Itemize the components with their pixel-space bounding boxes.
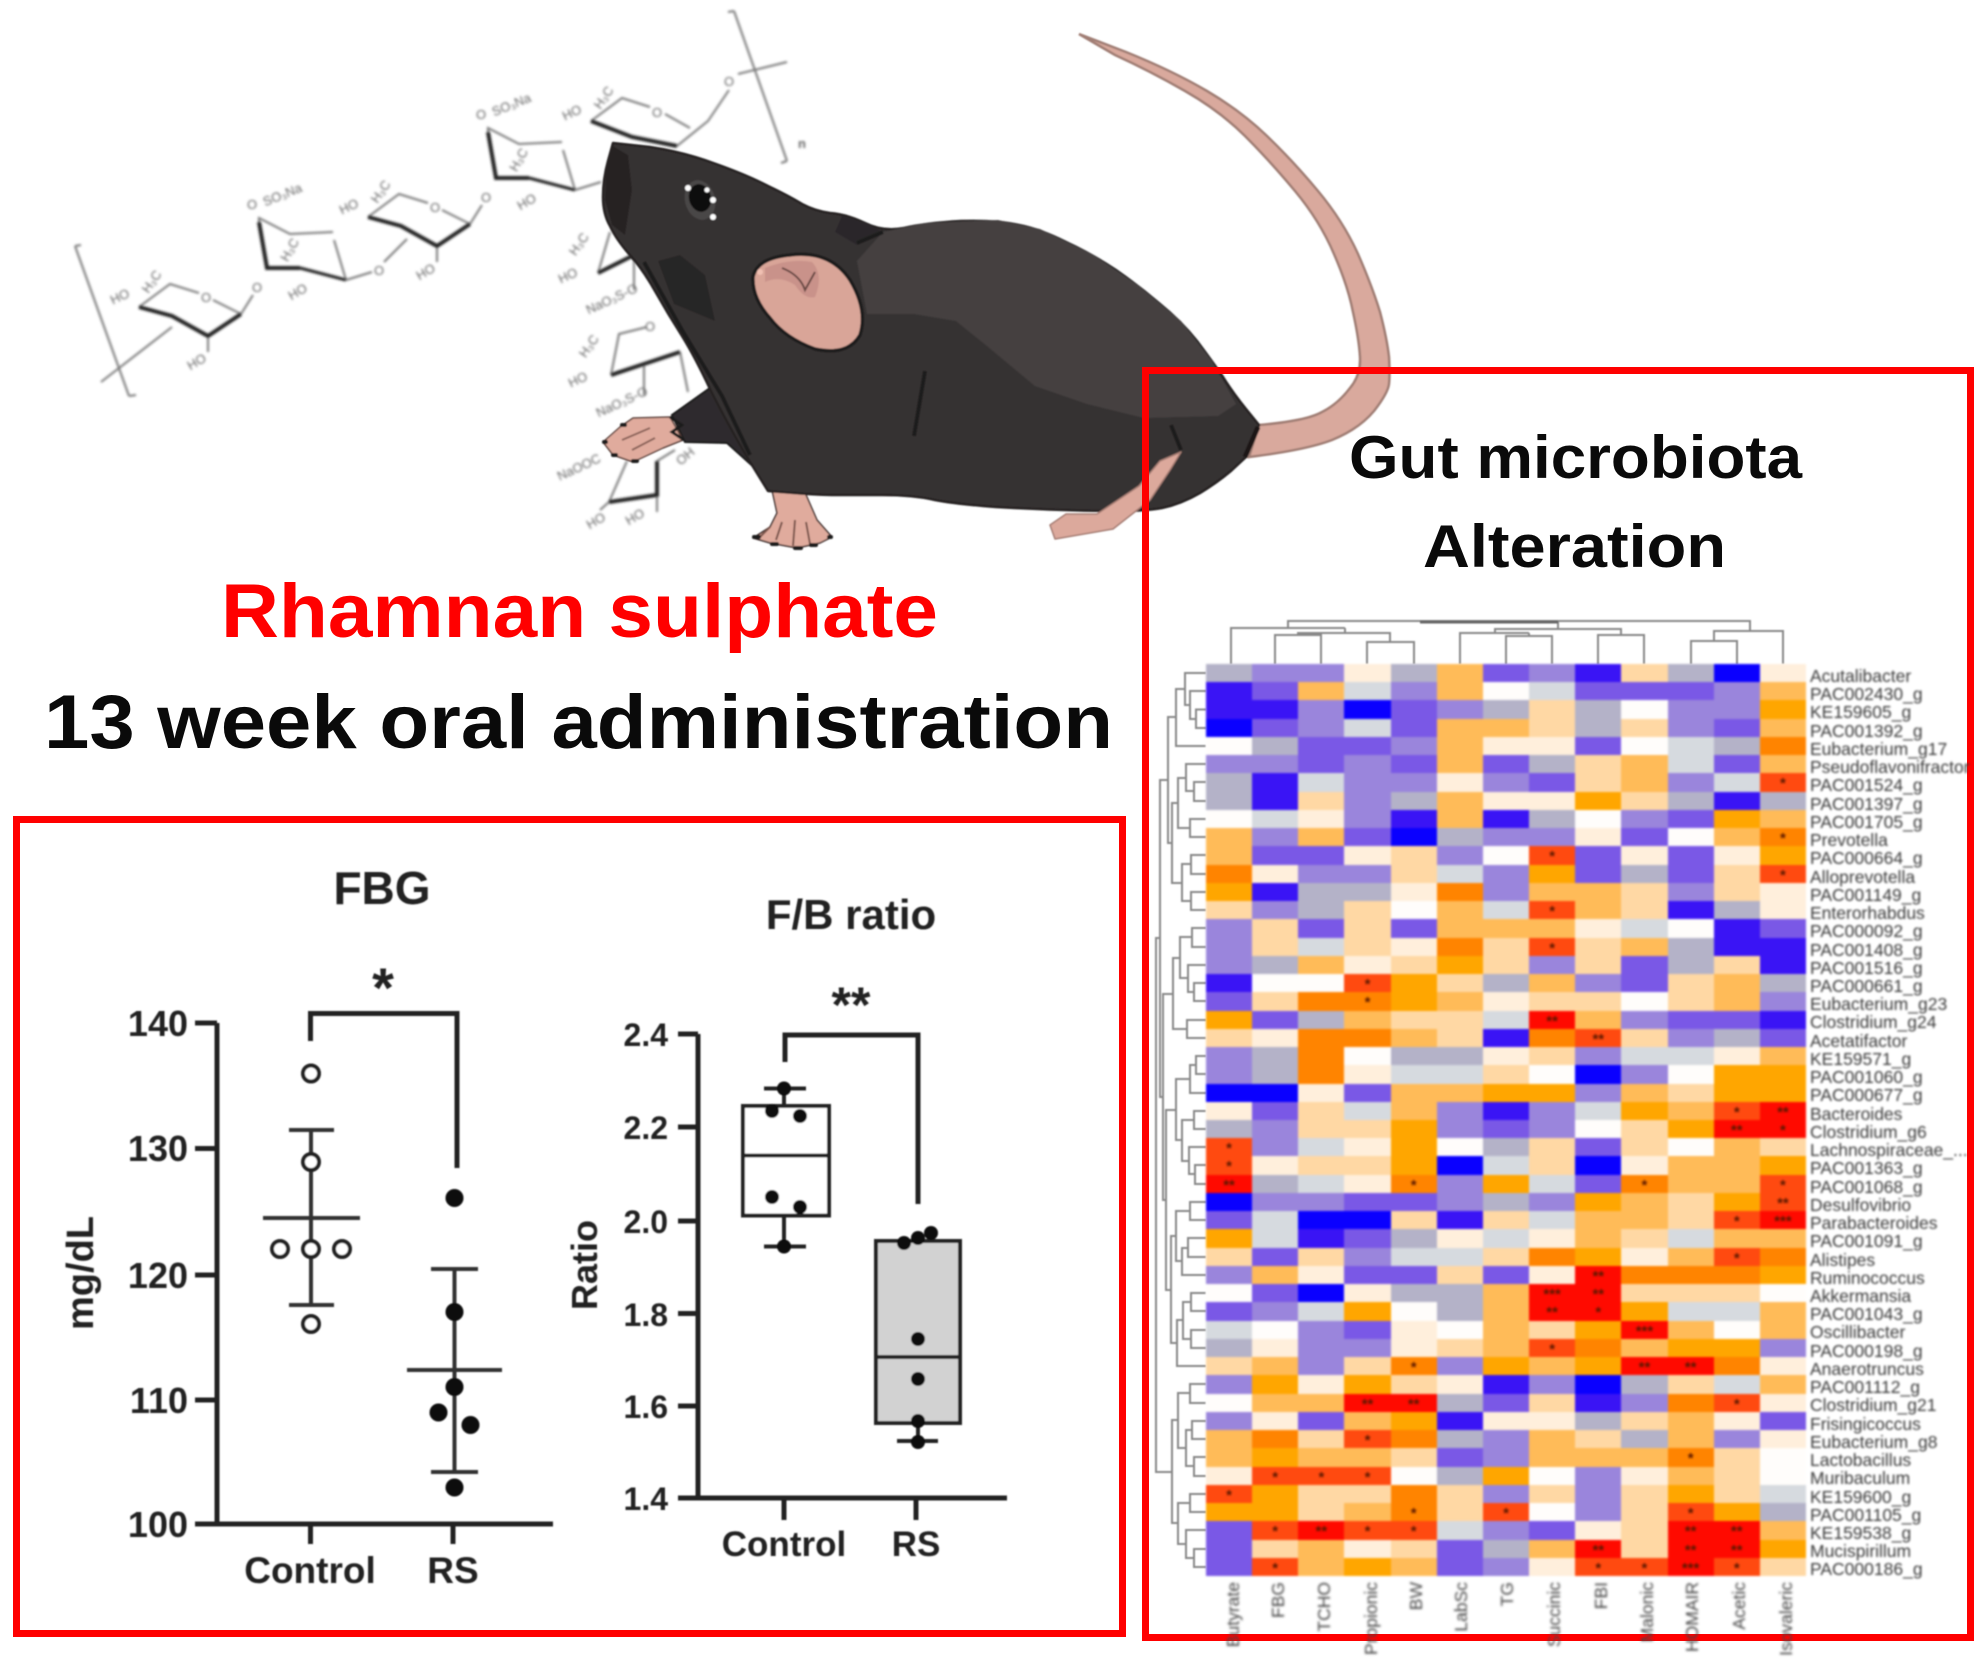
- heatmap row labels: Lactobacillus: [1810, 1450, 1911, 1470]
- heatmap cells: [1204, 662, 1808, 1578]
- rhamnan sulphate chemical structure: O: [201, 290, 211, 305]
- heatmap row labels: PAC000664_g: [1810, 848, 1923, 868]
- rhamnan sulphate chemical structure: HO: [556, 265, 580, 286]
- FBG y-axis title: mg/dL: [60, 1216, 102, 1330]
- F/B y-axis numbers: 2.4: [624, 1017, 668, 1053]
- FBG x-axis labels: RS: [427, 1550, 479, 1591]
- F/B y-axis title: Ratio: [564, 1220, 605, 1310]
- heatmap row labels: Anaerotruncus: [1810, 1359, 1924, 1379]
- rhamnan sulphate chemical structure: NaO₃S-O: [594, 383, 650, 420]
- heatmap row labels: PAC001105_g: [1810, 1505, 1921, 1525]
- icon: eye: [680, 177, 720, 223]
- heatmap row labels: PAC001060_g: [1810, 1067, 1923, 1087]
- title: Rhamnan sulphate: Rhamnan sulphate: [221, 569, 938, 654]
- heatmap row labels: PAC000092_g: [1810, 921, 1923, 941]
- heatmap column labels: LabSc: [1451, 1582, 1471, 1632]
- rhamnan sulphate chemical structure: O: [481, 190, 491, 205]
- heatmap row labels: Acetatifactor: [1810, 1031, 1907, 1051]
- heatmap row labels: PAC001408_g: [1810, 940, 1923, 960]
- left dendrogram: [1156, 673, 1206, 1567]
- body shading: back: [857, 220, 1236, 418]
- rhamnan sulphate chemical structure: HO: [566, 369, 590, 390]
- top dendrogram: [1231, 621, 1783, 664]
- rhamnan sulphate chemical structure: SO₃Na: [261, 180, 305, 209]
- heatmap column labels: FBG: [1268, 1582, 1288, 1618]
- FBG y-axis numbers: 100: [128, 1504, 188, 1545]
- heatmap column labels: Malonic: [1637, 1582, 1657, 1642]
- heading: F/B ratio: F/B ratio: [766, 891, 936, 938]
- heatmap row labels: Clostridium_g24: [1810, 1012, 1936, 1032]
- F/B y-axis numbers: 1.8: [624, 1297, 668, 1333]
- heatmap row labels: PAC001392_g: [1810, 721, 1923, 741]
- heatmap row labels: Eubacterium_g23: [1810, 994, 1947, 1014]
- heatmap row labels: Parabacteroides: [1810, 1213, 1937, 1233]
- heatmap row labels: Clostridium_g21: [1810, 1395, 1936, 1415]
- heatmap row labels: KE159600_g: [1810, 1487, 1911, 1507]
- rhamnan sulphate chemical structure: NaOOC: [555, 451, 603, 484]
- heatmap column labels: Succinic: [1544, 1582, 1564, 1647]
- FBG x-axis labels: Control: [244, 1550, 376, 1591]
- rhamnan sulphate chemical structure: H₃C: [506, 146, 531, 174]
- icon: front foot: [753, 488, 832, 548]
- F/B y-axis numbers: 1.4: [624, 1481, 668, 1517]
- heatmap column labels: TCHO: [1314, 1582, 1334, 1632]
- rhamnan sulphate chemical structure: O: [430, 200, 440, 215]
- F/B y-axis numbers: 1.6: [624, 1389, 668, 1425]
- heading: Gut microbiota Alteration: Alteration: [1423, 513, 1726, 580]
- heatmap row labels: PAC001705_g: [1810, 812, 1923, 832]
- heading: Gut microbiota Alteration: Gut microbiota: [1349, 424, 1803, 491]
- FBG y-axis numbers: [128, 1003, 188, 1545]
- FBG y-axis numbers: 140: [128, 1003, 188, 1044]
- heatmap row labels: [1808, 666, 1971, 1580]
- rhamnan sulphate chemical structure: HO: [413, 260, 438, 283]
- heatmap row labels: PAC001043_g: [1810, 1304, 1923, 1324]
- heatmap row labels: PAC000186_g: [1810, 1559, 1923, 1579]
- rhamnan sulphate chemical structure: HO: [285, 280, 310, 303]
- heatmap row labels: Alloprevotella: [1810, 867, 1915, 887]
- heatmap row labels: PAC000677_g: [1810, 1085, 1923, 1105]
- heatmap row labels: KE159605_g: [1810, 702, 1911, 722]
- heatmap row labels: PAC002430_g: [1810, 684, 1923, 704]
- rhamnan sulphate chemical structure: H₃C: [591, 83, 617, 112]
- FBG y-axis numbers: 120: [128, 1255, 188, 1296]
- rhamnan sulphate chemical structure: HO: [108, 286, 132, 307]
- significance: FBG star: *: [372, 956, 394, 1019]
- heatmap row labels: Ruminococcus: [1810, 1268, 1925, 1288]
- heatmap row labels: Acutalibacter: [1810, 666, 1911, 686]
- heatmap row labels: Desulfovibrio: [1810, 1195, 1911, 1215]
- rhamnan sulphate chemical structure: O: [476, 107, 486, 122]
- significance: F/B stars: **: [832, 977, 871, 1033]
- rhamnan sulphate chemical structure: n: [798, 136, 806, 151]
- body shading: throat: [658, 255, 715, 321]
- rhamnan sulphate chemical structure: O: [645, 319, 655, 334]
- rhamnan sulphate chemical structure: HO: [337, 196, 361, 217]
- rhamnan sulphate chemical structure: O: [374, 263, 384, 278]
- rhamnan sulphate chemical structure: H₃C: [566, 230, 592, 258]
- heatmap row labels: PAC001068_g: [1810, 1177, 1923, 1197]
- rhamnan sulphate chemical structure: H₃C: [576, 332, 602, 360]
- F/B y-axis numbers: 2.0: [624, 1204, 668, 1240]
- rhamnan sulphate chemical structure: H₃C: [368, 177, 394, 206]
- heatmap row labels: PAC001091_g: [1810, 1231, 1923, 1251]
- heatmap column labels: Acetic: [1729, 1582, 1749, 1630]
- rhamnan sulphate chemical structure: H₃C: [139, 267, 165, 296]
- heading: FBG: FBG: [333, 862, 431, 914]
- icon: front paw: [603, 417, 684, 462]
- panel: FBG and F/B ratio charts: [13, 816, 1126, 1637]
- heatmap column labels: BW: [1406, 1582, 1426, 1610]
- rhamnan sulphate chemical structure: HO: [514, 190, 539, 213]
- chart: FBG: [60, 862, 553, 1591]
- heading: Gut microbiota Alteration: [1349, 424, 1803, 580]
- heatmap row labels: PAC001524_g: [1810, 775, 1923, 795]
- heatmap row labels: Prevotella: [1810, 830, 1888, 850]
- icon: ear: [753, 254, 862, 351]
- icon: mouse tail: [1079, 34, 1390, 457]
- heatmap column labels: [1223, 1582, 1796, 1656]
- heatmap row labels: Lachnospiraceae_...: [1810, 1140, 1968, 1160]
- heatmap row labels: Clostridium_g6: [1810, 1122, 1927, 1142]
- rhamnan sulphate chemical structure: [75, 11, 806, 532]
- icon: mouse body: [603, 143, 1259, 511]
- FBG control group: [263, 1066, 360, 1332]
- chart: F/B ratio: [564, 891, 1007, 1564]
- panel: gut microbiota heatmap: [1142, 367, 1974, 1641]
- heatmap row labels: Mucispirillum: [1810, 1541, 1911, 1561]
- heatmap row labels: Alistipes: [1810, 1250, 1875, 1270]
- heatmap row labels: Akkermansia: [1810, 1286, 1911, 1306]
- FBG x-axis labels: [244, 1550, 479, 1591]
- F/B x-axis labels: [722, 1525, 940, 1564]
- rhamnan sulphate chemical structure: HO: [184, 350, 209, 373]
- rhamnan sulphate chemical structure: O: [652, 105, 662, 120]
- heatmap row labels: PAC000198_g: [1810, 1341, 1923, 1361]
- heatmap row labels: KE159538_g: [1810, 1523, 1911, 1543]
- FBG y-axis numbers: 130: [128, 1128, 188, 1169]
- heatmap row labels: Eubacterium_g17: [1810, 739, 1947, 759]
- F/B y-axis numbers: 2.2: [624, 1110, 668, 1146]
- rhamnan sulphate chemical structure: O: [247, 197, 257, 212]
- heatmap column labels: Butyrate: [1223, 1582, 1243, 1647]
- FBG y-axis numbers: 110: [130, 1380, 188, 1421]
- heatmap row labels: PAC001363_g: [1810, 1158, 1923, 1178]
- heatmap column labels: Isovaleric: [1776, 1582, 1796, 1656]
- mouse illustration: [603, 34, 1390, 548]
- rhamnan sulphate chemical structure: OH: [673, 444, 698, 468]
- heatmap column labels: FBI: [1591, 1582, 1611, 1609]
- FBG RS group: [407, 1189, 502, 1496]
- F/B control box: [743, 1082, 829, 1254]
- heatmap row labels: Frisingicoccus: [1810, 1414, 1921, 1434]
- rhamnan sulphate chemical structure: H₃C: [277, 236, 302, 264]
- F/B RS box: [876, 1226, 960, 1449]
- heatmap row labels: Eubacterium_g8: [1810, 1432, 1937, 1452]
- rhamnan sulphate chemical structure: NaO₃S-O: [584, 280, 640, 317]
- rhamnan sulphate chemical structure: HO: [623, 505, 647, 528]
- heatmap row labels: PAC001516_g: [1810, 958, 1923, 978]
- rhamnan sulphate chemical structure: O: [724, 74, 734, 89]
- heatmap column labels: HOMAIR: [1682, 1582, 1702, 1652]
- heatmap row labels: Pseudoflavonifractor: [1810, 757, 1970, 777]
- icon: back leg: [1050, 452, 1181, 539]
- heatmap column labels: TG: [1497, 1582, 1517, 1606]
- heatmap row labels: KE159571_g: [1810, 1049, 1911, 1069]
- icon: front arm: [672, 388, 757, 470]
- heatmap row labels: Bacteroides: [1810, 1104, 1902, 1124]
- rhamnan sulphate chemical structure: HO: [584, 509, 608, 532]
- rhamnan sulphate chemical structure: HO: [560, 102, 584, 123]
- heatmap column labels: Propionic: [1361, 1582, 1381, 1655]
- F/B x-axis labels: Control: [722, 1525, 846, 1564]
- heatmap row labels: PAC001397_g: [1810, 794, 1923, 814]
- heatmap row labels: PAC001112_g: [1810, 1377, 1920, 1397]
- F/B y-axis numbers: [624, 1017, 668, 1517]
- rhamnan sulphate chemical structure: SO₃Na: [490, 90, 534, 119]
- rhamnan sulphate chemical structure: O: [252, 280, 262, 295]
- F/B x-axis labels: RS: [892, 1525, 940, 1564]
- heatmap row labels: Enterorhabdus: [1810, 903, 1925, 923]
- heatmap row labels: Muribaculum: [1810, 1468, 1910, 1488]
- subtitle: 13 week oral administration: 13 week oral administration: [44, 680, 1113, 765]
- heatmap row labels: PAC000661_g: [1810, 976, 1923, 996]
- heatmap row labels: Oscillibacter: [1810, 1322, 1905, 1342]
- heatmap row labels: PAC001149_g: [1810, 885, 1921, 905]
